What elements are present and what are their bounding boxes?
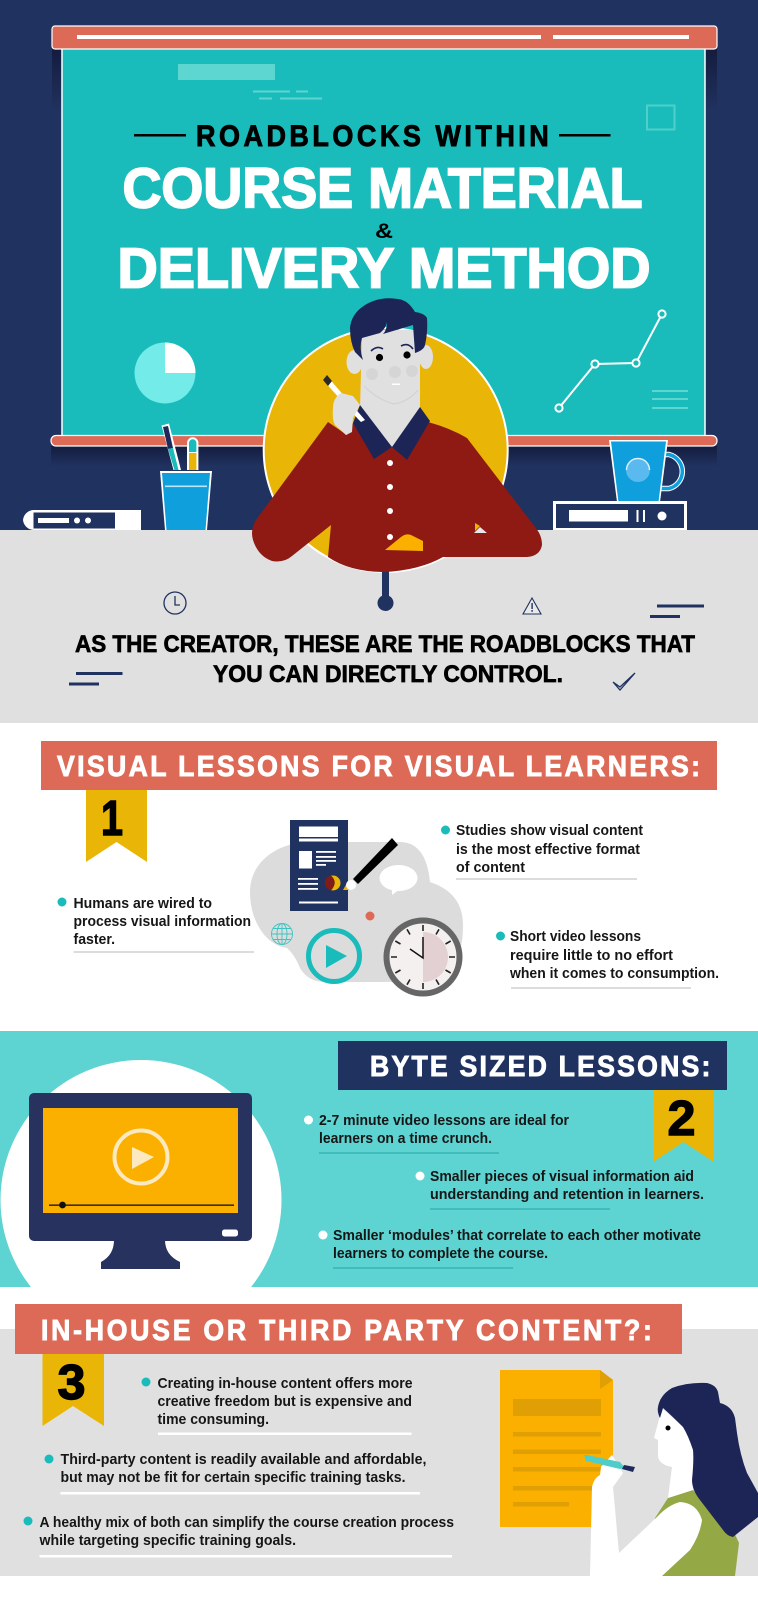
text: 2-7 minute: 2-7 minute video lessons are ideal for xyxy=(319,1112,569,1129)
icon: mug xyxy=(609,440,682,502)
text: 2-7 minute: learners on a time crunch. xyxy=(319,1130,492,1147)
subtitle xyxy=(75,631,695,688)
ribbon 3: 3 xyxy=(58,1356,86,1410)
panel: in-house or third party xyxy=(0,1304,758,1576)
text: smaller pieces: Smaller pieces of visual information aid xyxy=(430,1168,694,1185)
icon: pencil cup xyxy=(160,424,212,530)
illustration: content tools xyxy=(250,820,463,994)
icon: document xyxy=(290,820,348,911)
icon: monitor xyxy=(29,1093,252,1269)
illustration: document sheet xyxy=(500,1370,613,1527)
ribbon 1: 1 xyxy=(101,792,123,846)
title xyxy=(118,120,650,300)
woman arm xyxy=(590,1455,702,1576)
text: third-party: Third-party content is readily available and affordable, xyxy=(60,1451,426,1468)
text: studies: is the most effective format xyxy=(456,841,640,858)
ribbon 3 xyxy=(42,1354,104,1426)
text: healthy mix: while targeting specific training goals. xyxy=(39,1532,296,1549)
text: modules: learners to complete the course. xyxy=(333,1245,548,1262)
icon: book right xyxy=(553,501,687,531)
decorative warning icon xyxy=(523,598,541,614)
title line: course material: COURSE MATERIAL xyxy=(122,156,642,220)
ribbon 2 xyxy=(653,1090,714,1162)
text: third-party xyxy=(44,1451,426,1494)
illustration: man at desk xyxy=(252,298,542,611)
text: 2-7 minute xyxy=(304,1112,569,1154)
text: studies: of content xyxy=(456,859,525,876)
panel: visual lessons xyxy=(41,741,719,994)
text: short video: Short video lessons xyxy=(510,928,641,945)
board decorative square xyxy=(647,106,674,130)
decorative clock icon xyxy=(164,592,186,614)
text: creating in-house xyxy=(142,1375,412,1435)
text: humans: faster. xyxy=(74,931,115,948)
text: smaller pieces xyxy=(416,1168,704,1210)
icon: line chart xyxy=(555,310,666,412)
woman face and neck xyxy=(654,1408,695,1498)
icon: paint brush xyxy=(343,838,398,890)
decorative check icon xyxy=(613,673,635,690)
text: short video xyxy=(496,928,719,989)
chalkboard xyxy=(51,26,717,446)
icon: speech bubble xyxy=(380,865,418,895)
man cuff xyxy=(474,523,487,533)
title line: delivery method: DELIVERY METHOD xyxy=(118,236,650,300)
text: short video: require little to no effort xyxy=(510,947,673,964)
text: smaller pieces: understanding and retention in learners. xyxy=(430,1186,704,1203)
panel: classroom header xyxy=(0,0,758,531)
decorative lines right xyxy=(650,604,704,618)
text: modules xyxy=(318,1227,701,1269)
man neck and head xyxy=(346,330,433,450)
board bottom rail xyxy=(51,436,717,446)
board decorative lines xyxy=(652,390,688,409)
man collar xyxy=(353,405,430,460)
stem and ball xyxy=(378,570,394,611)
text: creating in-house: time consuming. xyxy=(158,1411,269,1428)
yellow circle xyxy=(264,328,508,572)
heading banner 1: VISUAL LESSONS FOR VISUAL LEARNERS: xyxy=(57,750,700,782)
board top rail xyxy=(52,26,717,49)
ribbon 1 xyxy=(86,790,147,862)
text: studies xyxy=(441,822,643,880)
text: creating in-house: creative freedom but is expensive and xyxy=(158,1393,412,1410)
man hand xyxy=(333,393,360,435)
board decorative note xyxy=(178,64,322,100)
icon: globe xyxy=(272,924,292,944)
text: humans: Humans are wired to xyxy=(74,895,212,912)
panel: grey desk xyxy=(0,530,758,723)
icon: play button xyxy=(308,930,360,982)
icon: book left xyxy=(23,510,141,530)
text: healthy mix: A healthy mix of both can simplify the course creation process xyxy=(40,1514,454,1531)
panel: byte sized lessons xyxy=(0,1031,758,1287)
woman hair xyxy=(658,1383,758,1537)
decorative lines left xyxy=(69,672,122,686)
heading banner 2 xyxy=(338,1041,727,1090)
text: humans: process visual information xyxy=(74,913,251,930)
text: modules: Smaller ‘modules’ that correlate to each other motivate xyxy=(333,1227,701,1244)
text: creating in-house: Creating in-house content offers more xyxy=(158,1375,412,1392)
ribbon 2: 2 xyxy=(668,1092,696,1146)
heading banner 1 xyxy=(41,741,717,790)
text: short video: when it comes to consumption. xyxy=(509,965,719,982)
woman eye xyxy=(666,1426,670,1430)
man pen xyxy=(323,375,365,422)
title ampersand: & xyxy=(375,220,393,243)
white circle backdrop xyxy=(0,1060,282,1287)
heading banner 3: IN-HOUSE OR THIRD PARTY CONTENT?: xyxy=(41,1314,652,1346)
text: studies: Studies show visual content xyxy=(456,822,643,839)
text: humans xyxy=(58,895,254,953)
man sweater xyxy=(252,422,542,572)
heading banner 2: BYTE SIZED LESSONS: xyxy=(370,1050,710,1082)
text: third-party: but may not be fit for certain specific training tasks. xyxy=(60,1469,406,1486)
text: healthy mix xyxy=(24,1514,454,1558)
man buttons xyxy=(387,460,393,540)
woman pen xyxy=(584,1455,635,1472)
woman top xyxy=(650,1490,739,1576)
icon: pie chart xyxy=(134,342,196,404)
subtitle: YOU CAN DIRECTLY CONTROL. xyxy=(213,661,563,688)
subtitle: AS THE CREATOR, THESE ARE THE ROADBLOCKS THAT xyxy=(75,631,695,658)
man pocket xyxy=(385,534,423,551)
man hair xyxy=(350,298,427,360)
icon: clock xyxy=(386,920,460,994)
heading banner 3 xyxy=(15,1304,682,1354)
illustration: woman with pen xyxy=(584,1383,758,1576)
red dot xyxy=(366,912,374,920)
title line: roadblocks within: ROADBLOCKS WITHIN xyxy=(196,120,549,153)
